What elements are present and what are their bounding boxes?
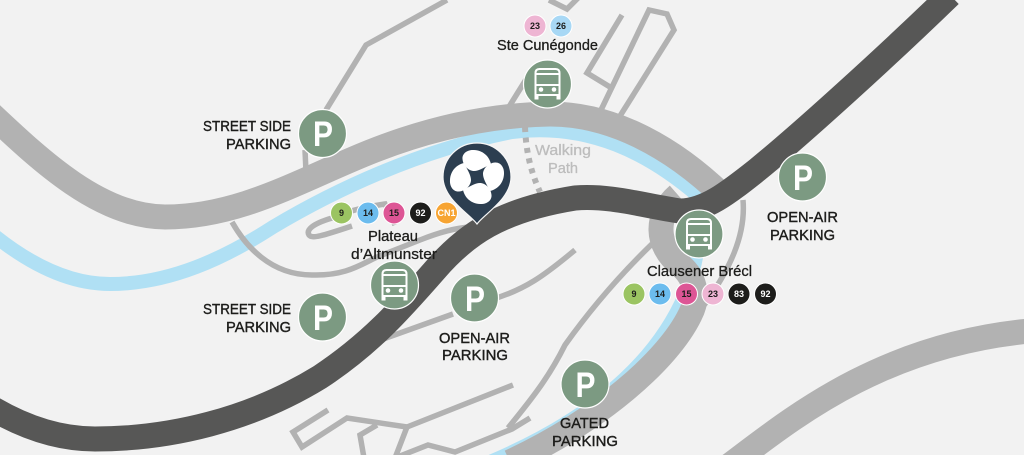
label: gated: GATED <box>560 415 609 432</box>
label: open-air centre <box>439 330 510 364</box>
label: gated: PARKING <box>552 433 618 450</box>
label: Ste Cunegonde: Ste Cunégonde <box>497 37 598 54</box>
parking marker: street side south <box>298 293 346 341</box>
lines: Clausener: 9 <box>631 289 637 299</box>
label: street side north: STREET SIDE <box>203 118 291 135</box>
road: interchange light <box>510 195 695 455</box>
parking marker: open-air east <box>778 153 826 201</box>
lines: Plateau <box>330 202 458 224</box>
bus stop: Clausener <box>675 210 723 258</box>
river <box>0 130 700 455</box>
bus stop: Plateau <box>370 261 418 309</box>
lines: Clausener <box>623 283 776 305</box>
parking marker: street side south: P <box>313 299 333 338</box>
label: walking path: Path <box>548 160 578 177</box>
parking marker: open-air centre <box>450 274 498 322</box>
lines: Ste Cunegonde: 23 <box>530 21 540 31</box>
lines: Plateau: 14 <box>363 208 373 218</box>
label: open-air east: PARKING <box>770 227 835 244</box>
label: Plateau: Plateau <box>368 228 418 245</box>
parking marker: gated <box>561 360 609 408</box>
minor roads <box>232 0 743 455</box>
lines: Plateau: 9 <box>339 208 344 218</box>
parking marker: open-air east: P <box>793 159 813 198</box>
parking marker: street side north <box>298 110 346 158</box>
lines: Ste Cunegonde: 26 <box>556 21 566 31</box>
label: street side north <box>203 118 291 153</box>
label: open-air east: OPEN-AIR <box>767 209 838 226</box>
label: Plateau <box>351 228 437 263</box>
road: highway light <box>0 113 722 217</box>
label: street side south <box>203 301 291 336</box>
lines: Clausener: 23 <box>708 289 718 299</box>
label: walking path: Walking <box>535 142 591 159</box>
label: walking path <box>535 142 591 177</box>
lines: Plateau: CN1 <box>437 208 456 218</box>
lines: Clausener: 14 <box>655 289 665 299</box>
lines: Plateau: 92 <box>415 208 426 218</box>
label: street side south: STREET SIDE <box>203 301 291 318</box>
label: open-air east <box>767 209 838 244</box>
icon: location pin <box>443 143 511 224</box>
label: Clausener: Clausener Brécl <box>647 263 752 280</box>
label: open-air centre: PARKING <box>442 347 508 364</box>
lines: Clausener: 15 <box>681 289 692 299</box>
lines: Clausener: 92 <box>760 289 771 299</box>
label: street side north: PARKING <box>226 136 291 153</box>
parking marker: gated: P <box>576 366 596 405</box>
road: south east <box>730 331 1024 455</box>
parking marker: open-air centre: P <box>465 280 485 319</box>
label: gated <box>552 415 618 450</box>
walking path <box>525 127 540 192</box>
label: Plateau: d’Altmunster <box>351 246 437 263</box>
label: street side south: PARKING <box>226 319 291 336</box>
bus stop: Ste Cunegonde <box>524 60 572 108</box>
lines: Plateau: 15 <box>389 208 399 218</box>
label: open-air centre: OPEN-AIR <box>439 330 510 347</box>
lines: Clausener: 83 <box>734 289 744 299</box>
lines: Ste Cunegonde <box>524 15 572 37</box>
parking marker: street side north: P <box>313 115 333 154</box>
